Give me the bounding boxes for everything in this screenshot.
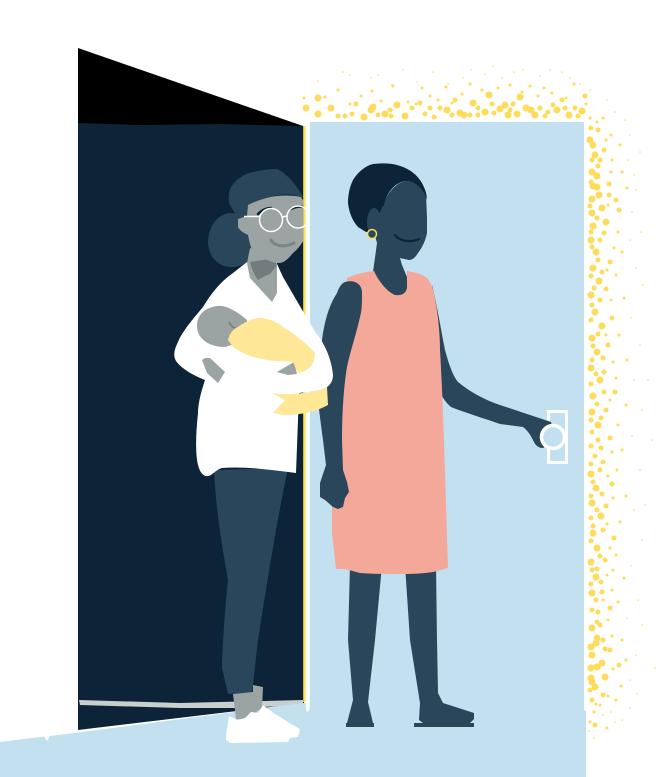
- light blue door: [310, 122, 584, 712]
- shirt: [174, 262, 333, 476]
- short hair: [348, 163, 427, 232]
- smile: [395, 235, 419, 241]
- earring: [368, 230, 376, 238]
- yellow light speckles around the door: [304, 66, 655, 738]
- glasses: [244, 206, 309, 232]
- mouth: [271, 240, 294, 246]
- hair: [229, 169, 303, 219]
- door edge strips: [303, 120, 310, 712]
- yellow ribbon: [272, 387, 328, 415]
- floor: [0, 703, 586, 777]
- bun: [208, 213, 252, 267]
- open dark doorway panel: [78, 123, 304, 730]
- baby closed eye: [229, 322, 241, 329]
- ear: [367, 208, 381, 236]
- baby foot left: [202, 358, 225, 383]
- legs: [347, 565, 382, 723]
- threshold strip: [79, 700, 303, 708]
- shoe soles: [346, 723, 474, 727]
- neck shadow: [250, 258, 276, 280]
- near arm and hand: [318, 281, 362, 509]
- dress: [332, 271, 448, 574]
- door knob plate: [548, 412, 566, 462]
- yellow blanket: [228, 318, 315, 373]
- neck and face: [372, 181, 427, 300]
- sock: [233, 685, 263, 720]
- baby head: [197, 306, 247, 347]
- eyebrows: [258, 208, 271, 214]
- baby foot right: [277, 362, 297, 375]
- woman holding baby: [174, 169, 333, 743]
- leg: [214, 468, 288, 694]
- head and neck: [229, 169, 304, 302]
- far arm: [428, 285, 556, 448]
- door knob: [542, 426, 564, 448]
- woman in coral dress: [318, 163, 564, 727]
- door frame shadow: black triangle: [78, 48, 303, 126]
- face: [238, 196, 304, 263]
- shoe: [226, 705, 300, 743]
